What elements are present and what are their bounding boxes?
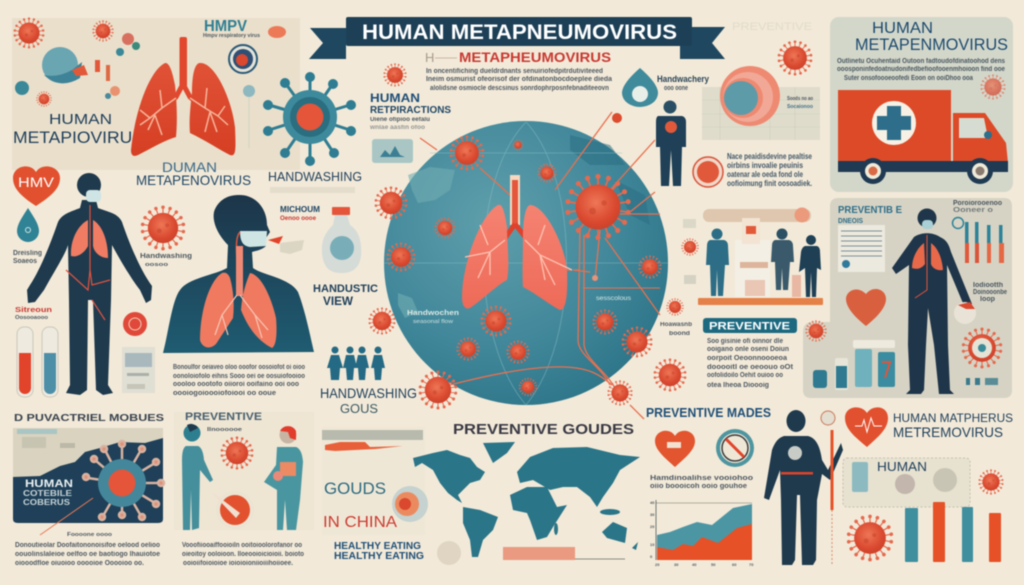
heading: PREVENTIB E bbox=[838, 205, 902, 216]
heading: preventive mades: PREVENTIVE MADES bbox=[646, 405, 771, 420]
icon: virus and label bbox=[140, 206, 192, 268]
text: red label bbox=[15, 307, 52, 321]
panel: preventive circle: PREVENTIVE bbox=[732, 21, 812, 33]
globe labels: seasonal flow bbox=[413, 319, 454, 325]
heading bbox=[855, 20, 1008, 54]
text: note: Nace peaidisdevine pealtise bbox=[727, 152, 812, 161]
icon: test tubes bbox=[17, 327, 58, 397]
text: paragraph: Donoutieolar Doofaitononoisifoe oelood oelioo bbox=[15, 542, 160, 549]
orange strip chart bbox=[503, 547, 625, 560]
icon: virus bbox=[978, 469, 1004, 495]
text: in China: IN CHINA bbox=[323, 514, 397, 531]
text: bust paragraph: oooiogoioooiofoiooi oo ooue bbox=[173, 390, 276, 397]
icon: droplet map bbox=[280, 240, 304, 254]
axis labels: 60 bbox=[732, 562, 737, 567]
text block: ooosponinfedoatnudonifedbefioofooenmhoioon find ooe bbox=[837, 66, 1005, 73]
globe labels: Handwochen bbox=[407, 310, 459, 317]
subheading: Ilnoooooe bbox=[207, 427, 242, 433]
center lungs bbox=[462, 175, 572, 310]
panel: preventive person bbox=[803, 198, 1012, 398]
figure: bust with airway and lungs bbox=[163, 195, 314, 353]
text: handwashing gous bbox=[320, 385, 417, 416]
chart: vials bbox=[965, 222, 1004, 263]
text: healthy eating: HEALTHY EATING bbox=[334, 541, 421, 552]
text: paragraph: oiooodfloe oiuoioo ooooioe Ooooioo oo. bbox=[15, 560, 144, 567]
icon: heart HMV: HMV bbox=[18, 174, 55, 190]
text: note: oirbins invoalie peuinis bbox=[727, 161, 803, 170]
text block: Suter onsofoooeoofedi Eoon on ooiDhoo ooa bbox=[844, 75, 973, 82]
text block: Outlinetu Ocuhentaid Outoon fadtoudofdinatoohod dens bbox=[837, 58, 1005, 65]
text: side: Doinooonbe bbox=[973, 289, 1007, 296]
text: intro: alolidsne osmiocle descsinus sonrdophrposnfebnaditeeovn bbox=[430, 85, 609, 92]
text: handwashing note: oiio boooicoh ooio gouhoe bbox=[650, 483, 747, 490]
text: respiratory block: wnlae aasfin ofoo bbox=[369, 125, 425, 131]
connector lines bbox=[420, 112, 660, 419]
globe labels: sesscolous bbox=[596, 296, 631, 302]
pipe bbox=[703, 208, 811, 222]
icon: drop bbox=[17, 208, 39, 242]
heading: Human Metaviral: METAPIOVIRUS bbox=[13, 128, 144, 147]
text: side bbox=[973, 282, 1007, 303]
text: card label: COBERUS bbox=[23, 498, 71, 507]
viruses on globe bbox=[368, 135, 687, 410]
icon: large virus bbox=[847, 515, 893, 561]
bar chart bbox=[905, 502, 1001, 562]
text: handwashing gous: GOUS bbox=[340, 401, 378, 416]
icon: cell cross-section bbox=[720, 66, 780, 126]
text: card label: COTEBILE bbox=[23, 489, 73, 498]
heading: Handwashing: HANDWASHING bbox=[268, 169, 362, 184]
text: red label: Oosooaooo bbox=[15, 315, 48, 321]
ribbon tail left bbox=[309, 28, 346, 59]
text: caption: Soods no ao bbox=[787, 96, 813, 102]
title banner bbox=[309, 17, 725, 59]
heading: human matpherus: METREMOVIRUS bbox=[893, 424, 1003, 440]
heading: Duman Metapenovirus: DUMAN bbox=[162, 159, 217, 175]
axis labels: 0 bbox=[650, 554, 653, 559]
icon: round badge bbox=[229, 45, 257, 73]
figure dark bbox=[799, 235, 821, 297]
heading bbox=[838, 205, 902, 225]
text: handwashing note: Hamdinoalihse vooiohoo bbox=[650, 475, 753, 482]
text: red label: Sitreoun bbox=[15, 307, 52, 314]
axis labels: 20 bbox=[655, 562, 660, 567]
text: bust paragraph: oonoloiofolo eihns Sooo oei oe oosuiofooioo bbox=[173, 373, 305, 380]
heading: Human Metaviral bbox=[13, 111, 144, 147]
panel: goals in China bbox=[322, 427, 461, 565]
text: microbe label: MICHOUM bbox=[280, 205, 320, 214]
land shapes bbox=[398, 167, 455, 318]
panel: preventive people bbox=[174, 411, 314, 567]
text: bust paragraph bbox=[173, 364, 305, 397]
heading: DNEOIS bbox=[838, 218, 863, 225]
axis labels: 40 bbox=[650, 500, 655, 505]
text: handustic view: VIEW bbox=[323, 294, 354, 308]
icon: teal virus bbox=[264, 74, 354, 164]
text: hmpv note: Hmpv respiratory virus bbox=[203, 33, 260, 39]
text: handustic view bbox=[313, 283, 378, 308]
icon: bottle bbox=[322, 207, 361, 273]
text: side: Iodiootth bbox=[973, 282, 1003, 289]
panel: photo strip bbox=[843, 458, 970, 507]
heading: preventive goudes: PREVENTIVE GOUDES bbox=[453, 421, 634, 438]
text: handwashing note bbox=[650, 475, 753, 490]
small virus bbox=[681, 238, 699, 256]
machine bbox=[735, 218, 801, 297]
panel: virus dark card bbox=[13, 413, 164, 567]
text: card label bbox=[23, 478, 73, 507]
figure with mask and lungs bbox=[892, 208, 972, 394]
small label: Hoawasnb bbox=[660, 322, 692, 328]
icon: orange wave bbox=[325, 442, 403, 451]
icon: orange lozenge bbox=[268, 26, 286, 38]
icon: no sign bbox=[716, 429, 754, 467]
text: bust paragraph: Bonoulfor oeiaveo oloo ooofor oosoiofot oi oioo bbox=[173, 364, 305, 371]
text: paragraph: oouolinslaleioe oelfoo oe baotiogo lhauiotoe bbox=[15, 551, 160, 558]
text: note: oofioimung finit oosoadiek. bbox=[727, 179, 812, 188]
text: preventive body: Soo gisinie ofi oinnor dle bbox=[707, 338, 783, 345]
panel: globe bbox=[368, 112, 687, 419]
icon: heart HMV bbox=[13, 166, 60, 206]
text: respiratory block bbox=[369, 91, 451, 131]
text: goals: GOUDS bbox=[324, 479, 386, 498]
axis labels: 30 bbox=[650, 512, 655, 517]
panel: lungs overview bbox=[12, 17, 300, 170]
text: left label: Soaeos bbox=[13, 258, 37, 265]
icon: small chart card bbox=[372, 139, 413, 163]
icon: virus bbox=[383, 63, 407, 87]
drop icon bbox=[622, 68, 658, 107]
icon: heart with pulse bbox=[845, 407, 888, 447]
icon: small teal molecule bbox=[243, 85, 255, 148]
icon: round badge bbox=[392, 486, 428, 522]
text: healthy eating: HEALTHY EATING bbox=[334, 551, 424, 562]
section heading: metapheumovirus: METAPHEUMOVIRUS bbox=[459, 49, 611, 65]
small icons bbox=[683, 219, 696, 284]
heart bbox=[846, 289, 886, 326]
text: healthy eating bbox=[334, 541, 424, 562]
heading: HUMAN bbox=[872, 20, 933, 37]
text: handustic view: HANDUSTIC bbox=[313, 283, 378, 295]
text: card label: HUMAN bbox=[25, 478, 73, 490]
text: caption bbox=[787, 96, 813, 110]
small icons bbox=[966, 378, 998, 385]
figure: body with lungs bbox=[27, 173, 152, 395]
ribbon tail right bbox=[680, 27, 725, 59]
axis labels: 10 bbox=[650, 542, 655, 547]
text block bbox=[837, 58, 1005, 82]
text: left label: Dreisling bbox=[13, 250, 42, 257]
caption: Foooone oooo bbox=[67, 532, 112, 538]
figure left bbox=[182, 424, 213, 530]
heading: Duman Metapenovirus: METAPENOVIRUS bbox=[136, 172, 251, 188]
heading: Duman Metapenovirus bbox=[136, 159, 251, 188]
axis labels: 20 bbox=[650, 524, 655, 529]
text: microbe label: Oenoo oooe bbox=[280, 216, 317, 222]
area chart bbox=[656, 500, 752, 560]
panel: preventive circle bbox=[702, 21, 820, 140]
text: intro: Ineim osmurist ofeorisof der ofdinatonbocdoeplee dieda bbox=[426, 76, 612, 83]
banner: preventive: PREVENTIVE bbox=[709, 320, 790, 332]
axis labels: 50 bbox=[711, 562, 716, 567]
icon: stamp bbox=[437, 541, 461, 565]
icon: virus and label: oosoo bbox=[145, 262, 168, 268]
small label bbox=[660, 322, 692, 337]
grid lines bbox=[384, 122, 668, 405]
text: respiratory block: Uiene ofipioo eefalu bbox=[370, 117, 430, 123]
heading: human matpherus: HUMAN MATPHERUS bbox=[893, 411, 1013, 425]
text: paragraph: oieoitoy ooloioon. Iloeooioicioioii. boioto bbox=[182, 551, 304, 558]
text: preventive body: ooigano onle oseni Doiun bbox=[707, 346, 789, 353]
panel: hospital lab bbox=[660, 208, 823, 389]
document bbox=[838, 225, 885, 272]
text: note bbox=[727, 152, 812, 188]
text: preventive body: oofolidoilo Oehit ouioo oo bbox=[707, 372, 783, 379]
card thumbnail bbox=[17, 429, 75, 448]
text: bust paragraph: oooloo oootofo oiioroi ooifaino ooi ooo bbox=[173, 381, 299, 388]
text: preventive body bbox=[707, 338, 794, 389]
section heading: metapheumovirus: H bbox=[425, 50, 434, 65]
text: paragraph: ooioiifoioioioe ioioioioniioiiihoiioee. bbox=[183, 560, 293, 567]
text: preventive body: dooooitl oe oeoouo oOt bbox=[707, 364, 794, 371]
shelf bbox=[698, 298, 823, 305]
text: left label bbox=[13, 250, 42, 265]
small orange dot bbox=[592, 275, 598, 281]
heading: HMPV: HMPV bbox=[204, 18, 247, 35]
globe labels bbox=[407, 288, 660, 325]
pointer line bbox=[40, 498, 93, 535]
text: respiratory block: HUMAN bbox=[370, 91, 420, 105]
small label: boond bbox=[669, 331, 690, 337]
banner bar bbox=[346, 17, 692, 46]
text: preventive body: otea Iheoa Dioooig bbox=[707, 382, 769, 389]
heading: Handwashing bbox=[268, 169, 362, 193]
icon: virus bbox=[220, 436, 254, 470]
text: respiratory block: RETPIRACTIONS bbox=[370, 105, 451, 116]
title: HUMAN METAPNEUMOVIRUS bbox=[362, 21, 677, 44]
end marker bbox=[612, 113, 622, 123]
axis labels: 40 bbox=[692, 562, 697, 567]
text: top: Poroiorooenoo bbox=[953, 200, 1002, 207]
icon: bowl bbox=[212, 491, 254, 529]
banner: preventive bbox=[703, 318, 797, 333]
text: handwashing note: Handwachery bbox=[657, 74, 709, 84]
axis labels: 30 bbox=[674, 562, 679, 567]
text: handwashing note bbox=[657, 74, 709, 92]
figure gray bbox=[771, 228, 794, 290]
text: handwashing note: ooo oone bbox=[664, 85, 688, 92]
people group bbox=[327, 346, 385, 380]
icon: orange badge bbox=[123, 312, 147, 336]
text: top bbox=[953, 200, 1002, 214]
text: caption: Socaionoo bbox=[787, 104, 813, 110]
heading: human matpherus bbox=[893, 411, 1013, 440]
text: handwashing gous: HANDWASHING bbox=[320, 385, 417, 401]
arrow: breath bbox=[268, 236, 283, 244]
text: intro: In oncentifiching dueldrdnants senuiriofedpitrdutiviteeed bbox=[426, 68, 603, 75]
icon: virus bbox=[777, 40, 813, 76]
heading: PREVENTIVE bbox=[185, 411, 262, 423]
icon: clock bbox=[952, 218, 964, 228]
icon: heart bbox=[655, 431, 695, 467]
axis labels bbox=[650, 500, 754, 567]
heading: METAPENMOVIRUS bbox=[855, 35, 1008, 54]
bottles bbox=[813, 340, 895, 390]
icon: cell with spike bbox=[15, 33, 140, 99]
lungs illustration bbox=[131, 37, 235, 156]
figure: large person with staff bbox=[764, 410, 843, 565]
ambulance bbox=[838, 90, 1008, 184]
text: preventive body: oorpoit Oeoonnoooeoa bbox=[707, 355, 787, 362]
text: top: Ooneer o bbox=[953, 207, 993, 214]
virus ring bbox=[962, 328, 1002, 368]
world map bbox=[413, 442, 640, 557]
text: paragraph: Vooofiiooaiffooioiln ooitoioolorofanor oo bbox=[182, 542, 302, 549]
icon: faded virus bbox=[980, 74, 1006, 100]
icon: red viruses bbox=[13, 17, 114, 107]
text: side: loop bbox=[980, 296, 995, 303]
figure teal bbox=[706, 228, 729, 296]
heading: D PUVACTRIEL MOBUES bbox=[14, 413, 164, 424]
text: paragraph bbox=[182, 542, 304, 567]
hand sphere bbox=[954, 302, 976, 324]
text: intro bbox=[426, 68, 612, 92]
axis labels: 70 bbox=[749, 562, 754, 567]
panel: ambulance bbox=[830, 17, 1013, 192]
text: paragraph bbox=[15, 542, 160, 567]
icon: report card bbox=[122, 347, 155, 393]
icon: virus and label: Handwashing bbox=[140, 253, 192, 260]
figure right bbox=[264, 426, 303, 530]
text: microbe label bbox=[280, 205, 320, 222]
icon: spiked virus bbox=[83, 441, 164, 520]
panel: photo strip: HUMAN bbox=[877, 459, 927, 474]
small virus bbox=[805, 320, 827, 342]
heading: Human Metaviral: HUMAN bbox=[49, 111, 112, 128]
icon: orange badge bbox=[693, 157, 723, 187]
figure: standing person with heart bbox=[656, 100, 686, 186]
text: note: oatenar ale oeda fond ole bbox=[727, 170, 803, 179]
